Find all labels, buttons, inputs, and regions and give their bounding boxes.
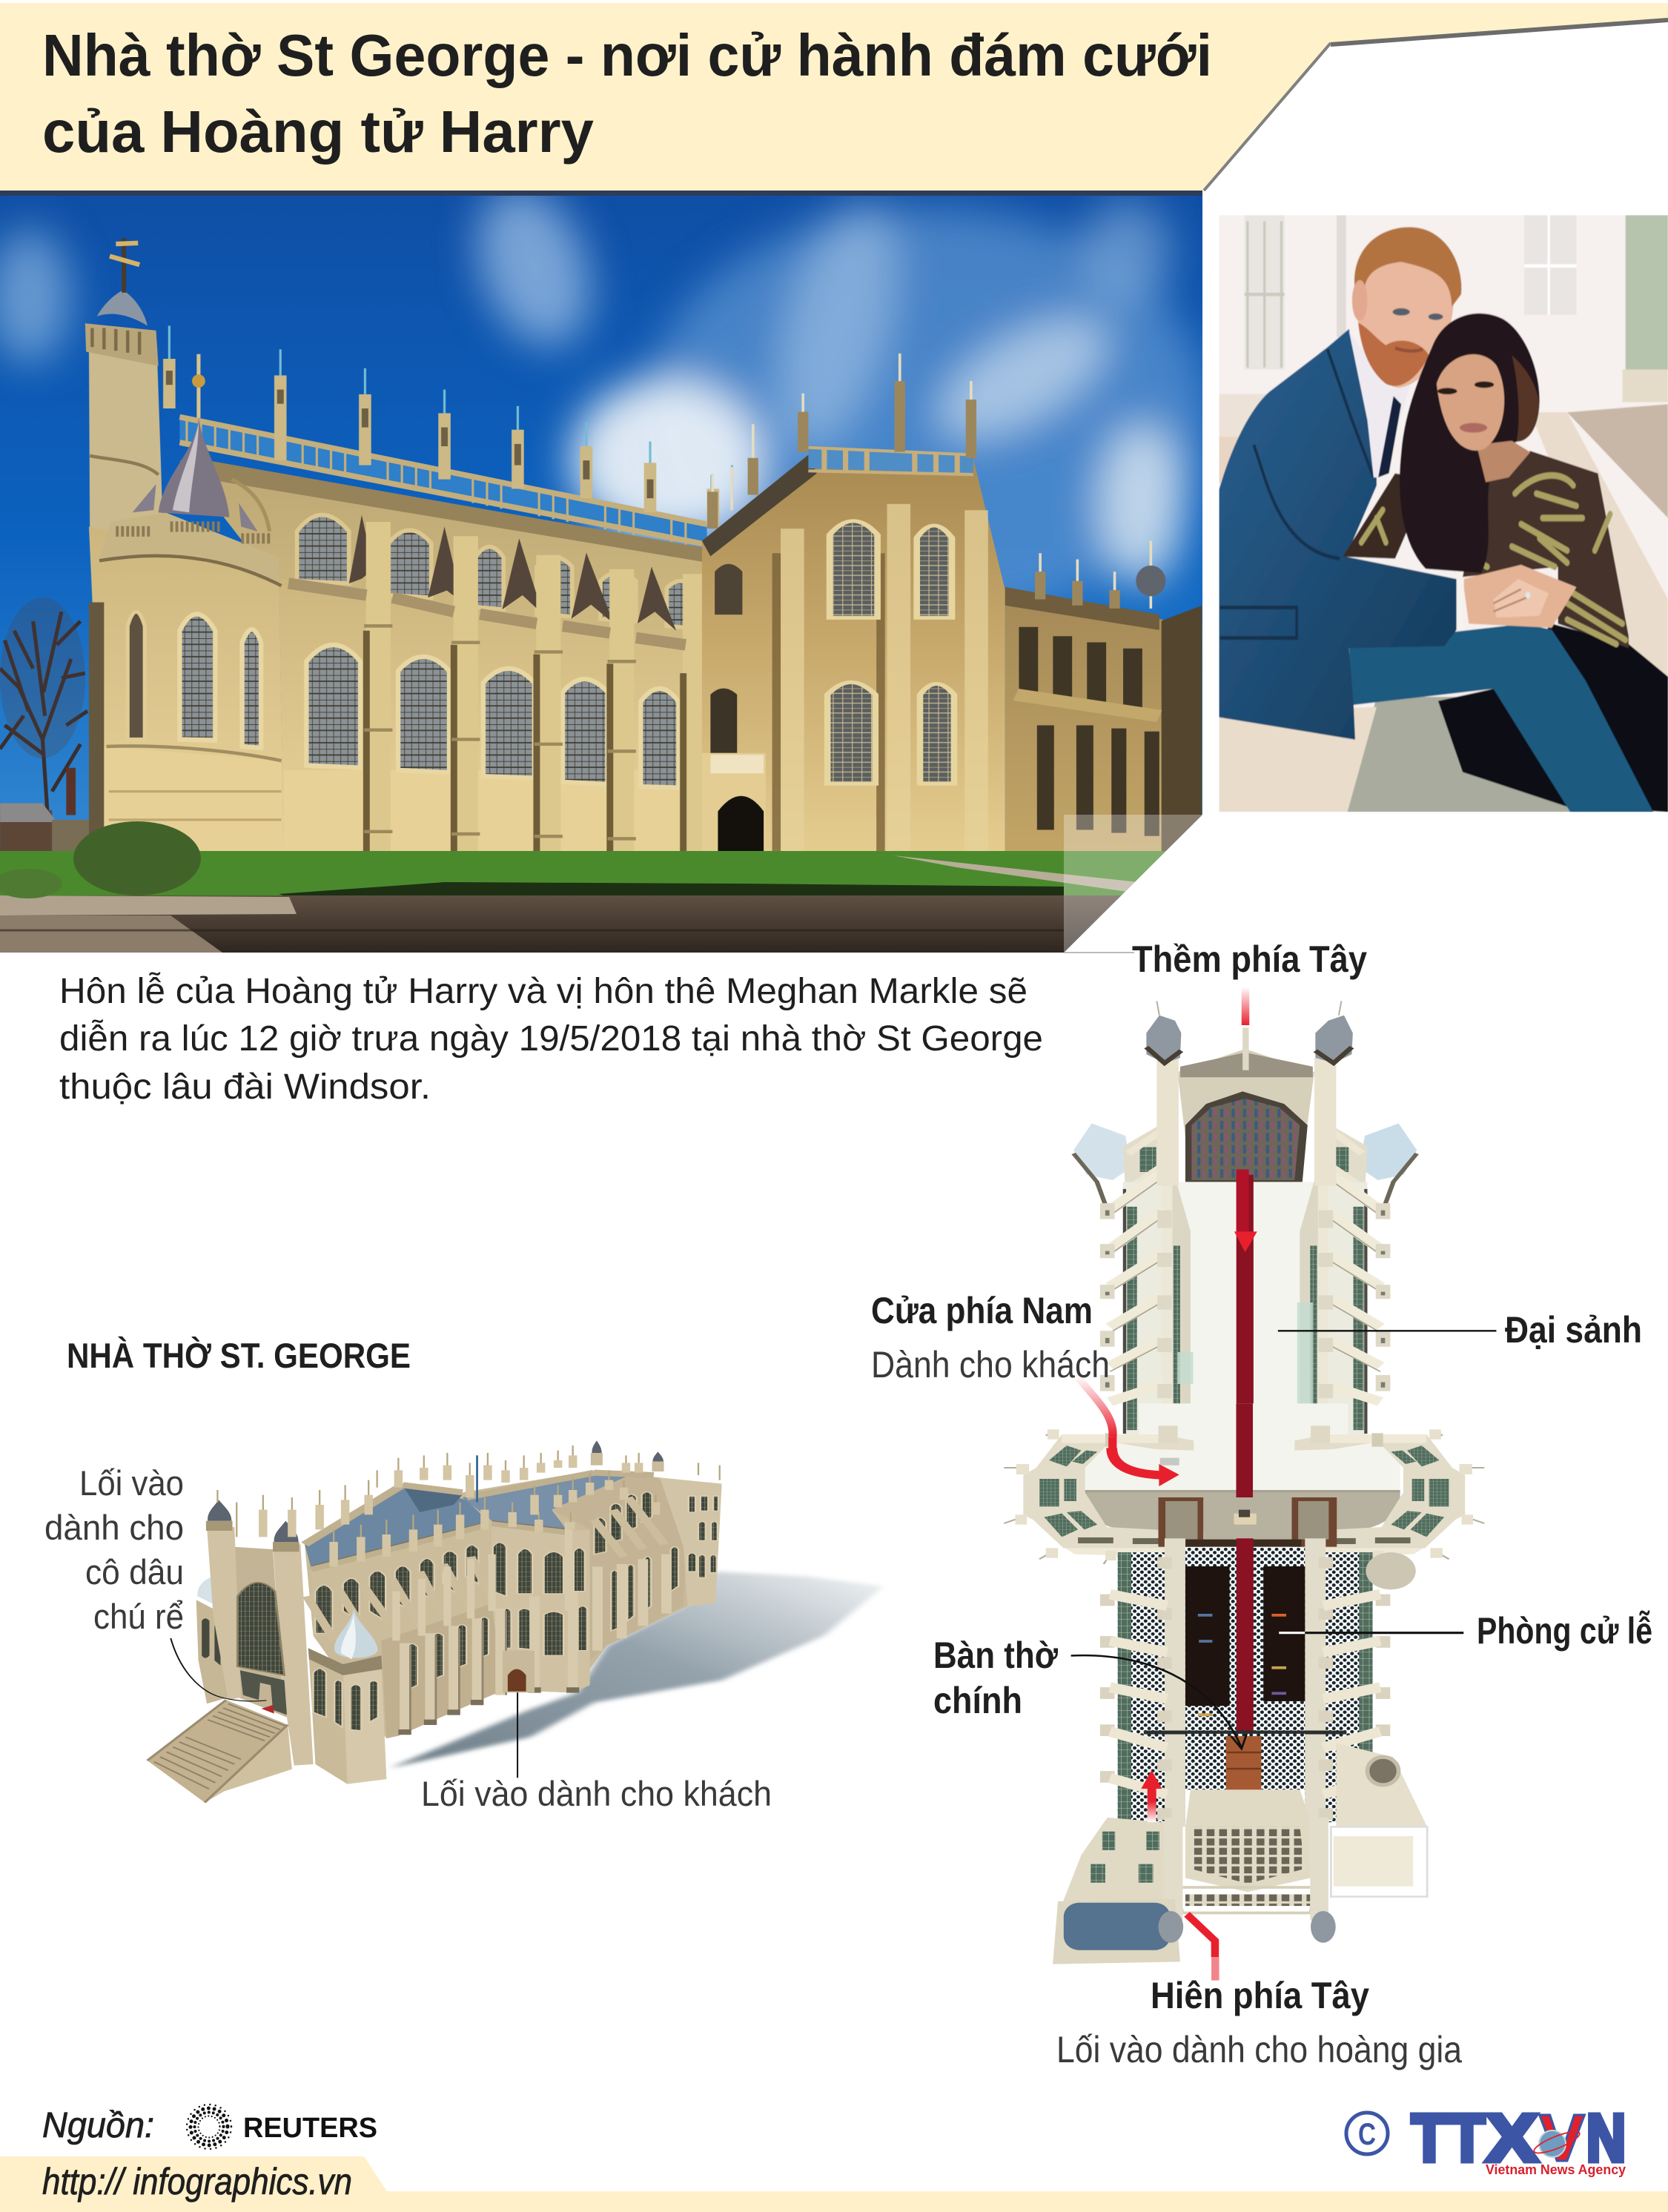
screen band — [1085, 1492, 1400, 1531]
intro paragraph: thuộc lâu đài Windsor. — [59, 1067, 431, 1107]
label: Thềm phía Tây: Thềm phía Tây — [1132, 938, 1367, 980]
great west window — [237, 1583, 285, 1675]
backing silhouette — [305, 1470, 722, 1738]
intro paragraph: Hôn lễ của Hoàng tử Harry và vị hôn thê Meghan Markle sẽ — [59, 971, 1027, 1011]
logo: TTXVN Vietnam News Agency: V — [1539, 2102, 1585, 2176]
lantern dome — [159, 418, 229, 517]
leader lines — [171, 1638, 266, 1701]
tower — [89, 347, 163, 536]
parapet spires near — [396, 1522, 569, 1640]
grass — [0, 851, 1202, 900]
website url: http:// infographics.vn — [42, 2161, 352, 2202]
west porch red line — [1187, 1914, 1215, 1957]
east pinnacles — [712, 354, 1151, 609]
label: Hiên phía Tây: Hiên phía Tây — [1151, 1975, 1369, 2016]
parapets — [305, 1473, 654, 1569]
lodge — [0, 810, 52, 851]
crossing floor — [1085, 1443, 1400, 1491]
plan: east half — [1053, 1538, 1463, 1981]
translucent patch — [1064, 815, 1202, 953]
pinnacles — [169, 325, 732, 498]
footer band — [0, 2156, 1668, 2212]
transept — [702, 455, 1005, 855]
her face — [1437, 354, 1504, 451]
clerestory and lower nave — [179, 460, 709, 669]
logo: TTXVN Vietnam News Agency: T — [1449, 2102, 1485, 2176]
parapet shadow band — [208, 460, 704, 562]
label: Bàn thờ chính — [933, 1635, 1058, 1721]
icon: copyright — [1346, 2113, 1388, 2154]
icon: Reuters logo — [187, 2105, 231, 2149]
trousers — [1349, 623, 1653, 812]
red up arrow — [1148, 1787, 1156, 1822]
her neck — [1477, 441, 1530, 483]
heading: NHÀ THỜ ST. GEORGE: NHÀ THỜ ST. GEORGE — [67, 1336, 411, 1375]
south door arrow — [1112, 1448, 1162, 1475]
flying buttresses — [307, 1497, 664, 1640]
photo: St George chapel exterior — [0, 173, 1208, 953]
west part of chapel — [0, 238, 732, 876]
title — [42, 22, 1212, 165]
base wall — [0, 895, 1202, 953]
choir — [1185, 1566, 1230, 1706]
east nave — [552, 1474, 688, 1660]
tree — [0, 612, 87, 810]
east part of chapel — [702, 354, 1202, 855]
label: Lối vào dành cho hoàng gia: Lối vào dành cho hoàng gia — [1056, 2029, 1462, 2070]
cutaway floor plan of the chapel — [1004, 987, 1496, 1981]
label: bride and groom entrance — [44, 1463, 184, 1636]
label: Đại sảnh: Đại sảnh — [1505, 1309, 1642, 1351]
left chapel — [1063, 1818, 1165, 1901]
parapet — [99, 512, 279, 586]
transept windows — [827, 521, 954, 784]
title: Nhà thờ St George - nơi cử hành đám cưới — [42, 22, 1212, 88]
header banner — [0, 3, 1668, 196]
plan: crossing wings — [1004, 1403, 1484, 1564]
source: Nguồn: Nguồn: — [42, 2106, 154, 2145]
top red line — [1242, 987, 1249, 1025]
nave floor — [1136, 1182, 1354, 1483]
choir sides — [1108, 1538, 1185, 1827]
skirt — [1438, 623, 1668, 812]
icon: copyright: C — [1358, 2116, 1376, 2151]
shirt and tie — [1349, 331, 1411, 477]
transept porch and door — [503, 1651, 535, 1692]
side domes — [1073, 1123, 1131, 1180]
label: bride and groom entrance: chú rể — [93, 1597, 184, 1636]
white dome — [334, 1609, 378, 1658]
Reuters wordmark: REUTERS — [243, 2113, 377, 2144]
roof — [305, 1484, 488, 1568]
hands and cuff — [1463, 565, 1576, 628]
his head — [1357, 251, 1454, 388]
photo: Prince Harry and Meghan Markle — [1219, 215, 1668, 812]
plan: upper south door arrow — [1077, 1331, 1496, 1451]
balustrade — [179, 416, 707, 543]
staircase — [148, 1700, 288, 1803]
left tower — [207, 1527, 241, 1700]
pinnacles — [217, 1446, 720, 1562]
step and ground — [1346, 697, 1601, 812]
red carpet — [1237, 1175, 1254, 1483]
west facade — [1177, 1049, 1314, 1182]
nave south clerestory — [311, 1523, 492, 1644]
intro paragraph — [59, 971, 1043, 1107]
buttresses — [378, 522, 695, 853]
label: bride and groom entrance: cô dâu — [85, 1552, 184, 1592]
her hair — [1400, 314, 1540, 573]
label: Cửa phía Nam: Cửa phía Nam — [871, 1290, 1093, 1331]
buttress sides — [1108, 1111, 1191, 1437]
clouds — [0, 173, 1208, 623]
Đại sảnh leader — [1278, 1329, 1496, 1333]
label: Dành cho khách: Dành cho khách — [871, 1344, 1110, 1385]
dress — [1343, 473, 1417, 559]
carpet crossing — [1236, 1403, 1253, 1497]
east tower — [660, 1477, 722, 1606]
aisle windows — [407, 1496, 718, 1690]
label: Bàn thờ chính: Bàn thờ — [933, 1635, 1058, 1676]
intro paragraph: diễn ra lúc 12 giờ trưa ngày 19/5/2018 tại nhà thờ St George — [59, 1019, 1043, 1059]
sanctuary — [1185, 1734, 1305, 1789]
upper windows — [297, 515, 692, 629]
logo: TTXVN Vietnam News Agency: T — [1411, 2102, 1447, 2176]
clerestory windows — [315, 1491, 652, 1633]
logo: TTXVN Vietnam News Agency: X — [1486, 2102, 1538, 2176]
door — [702, 753, 766, 855]
bushes — [73, 821, 201, 895]
plan: west half — [1073, 987, 1417, 1483]
logo: TTXVN Vietnam News Agency — [1411, 2102, 1626, 2177]
west left chapel — [196, 1600, 228, 1703]
title: của Hoàng tử Harry — [42, 99, 594, 165]
west front — [233, 1547, 287, 1718]
high altar — [1226, 1736, 1261, 1797]
logo: TTXVN Vietnam News Agency: Vietnam News Agency — [1486, 2162, 1626, 2177]
transept buttresses — [792, 504, 976, 851]
label: bride and groom entrance: Lối vào — [79, 1463, 184, 1503]
flying buttress shadows — [349, 515, 676, 631]
dark domes — [208, 1500, 231, 1521]
hairline under photo — [1064, 952, 1134, 953]
sanctuary leader — [1279, 1631, 1305, 1635]
east towers — [1158, 1911, 1183, 1943]
cast shadow — [390, 1572, 884, 1768]
label: Bàn thờ chính: chính — [933, 1680, 1022, 1721]
lower buttresses — [405, 1554, 666, 1735]
south-west chapel — [309, 1658, 386, 1784]
label: guest entrance: Lối vào dành cho khách — [421, 1774, 772, 1813]
right wing — [1005, 590, 1202, 855]
suit — [1219, 329, 1457, 740]
transept — [491, 1522, 590, 1692]
lower windows — [179, 614, 678, 788]
right tower — [273, 1544, 314, 1766]
west towers — [1146, 1016, 1181, 1063]
choir screen — [1159, 1497, 1203, 1547]
carpet — [1237, 1538, 1254, 1734]
nave south aisle — [381, 1603, 503, 1738]
logo: TTXVN Vietnam News Agency: N — [1586, 2102, 1626, 2176]
altar leader — [1071, 1655, 1242, 1748]
label: bride and groom entrance: dành cho — [44, 1508, 184, 1547]
right block — [1336, 1743, 1427, 1827]
3D model of the chapel — [148, 1440, 884, 1803]
octagon chapel — [89, 526, 284, 858]
east apse — [1185, 1789, 1313, 1892]
